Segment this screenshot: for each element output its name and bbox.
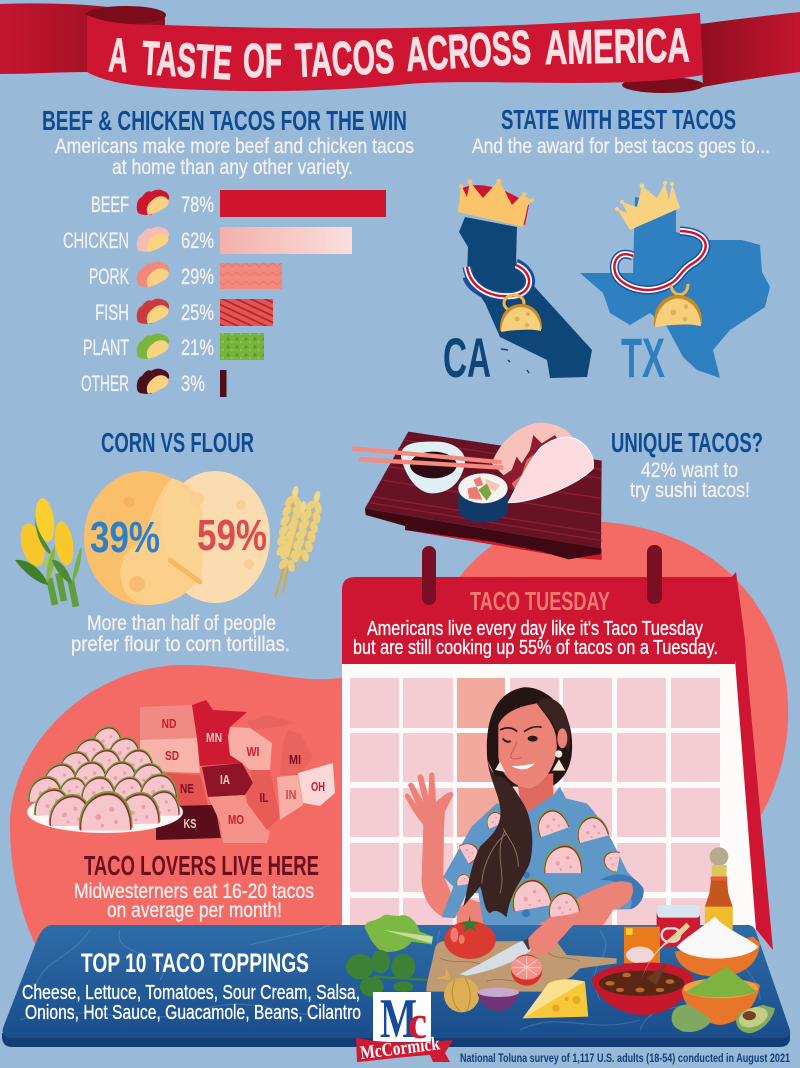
state: OH: [298, 763, 335, 806]
calendar fold: [729, 572, 773, 950]
state: SD: [140, 738, 200, 773]
green guacamole bowl: [682, 967, 760, 1025]
coral blobs: [10, 521, 788, 950]
knife: [459, 933, 537, 976]
description: [71, 612, 290, 656]
calendar rings: [422, 545, 662, 605]
hand and forearm: [528, 897, 620, 956]
flour bowl: [675, 917, 760, 977]
calendar header: [342, 577, 735, 664]
lettuce: [365, 915, 433, 952]
logo wordmark: McCormick: [359, 1033, 441, 1064]
illustration: sushi taco on tray: [352, 423, 602, 560]
icon: corn: [15, 497, 82, 607]
TX label: TX: [621, 326, 665, 389]
title words: [107, 19, 690, 90]
tray: [365, 432, 602, 560]
row: other: [81, 369, 226, 397]
panel: state with best tacos: [443, 104, 770, 389]
row: plant: PLANT: [83, 335, 129, 360]
taco: [492, 423, 594, 503]
state: NE: NE: [180, 781, 194, 796]
description: at home than any other variety.: [112, 156, 353, 179]
soy sauce dish: [401, 442, 465, 493]
cutting board: [426, 941, 617, 992]
row: plant: 21%: [181, 335, 214, 360]
state: IA: [202, 763, 253, 797]
logo mark: c: [408, 996, 427, 1049]
title banner: [0, 3, 800, 93]
neck: [517, 773, 553, 813]
state: MO: MO: [228, 812, 244, 827]
state: ND: [140, 705, 197, 740]
row: chicken: [63, 227, 352, 254]
eyes and brows: [500, 727, 542, 742]
state: WI: WI: [246, 744, 260, 759]
state: IL: IL: [260, 790, 269, 805]
panel: corn vs flour: [15, 427, 329, 656]
cilantro: [346, 950, 430, 997]
title words: OF: [243, 35, 282, 88]
state: NE: [157, 773, 208, 805]
description: on average per month!: [107, 899, 282, 922]
panel: beef and chicken tacos: [42, 105, 414, 397]
heading: TOP 10 TACO TOPPINGS: [81, 948, 309, 978]
title words: TACOS: [294, 31, 395, 88]
row: fish: FISH: [95, 300, 129, 325]
cut tomato: [511, 954, 542, 986]
icon: wheat: [272, 484, 329, 597]
ear: [557, 728, 567, 748]
description: Americans make more beef and chicken tacos: [55, 135, 414, 158]
state: IN: IN: [286, 787, 296, 802]
earrings: [495, 750, 565, 772]
title words: AMERICA: [544, 19, 690, 75]
Texas map with crown and medal: [580, 181, 770, 378]
cheese: [523, 979, 588, 1018]
California map with crown and medal: [458, 178, 592, 378]
row: other: 3%: [181, 371, 205, 396]
state: IN: [277, 775, 303, 820]
midwest map: [140, 700, 335, 843]
logo mark: M: [380, 988, 417, 1050]
row: chicken: 62%: [181, 228, 214, 253]
toppings list: [22, 981, 361, 1024]
venn tortillas: [84, 471, 270, 605]
row: beef: 78%: [181, 192, 214, 217]
state: MN: [192, 700, 247, 766]
shirt buttons: [522, 872, 530, 917]
illustration: ingredients right: [592, 847, 775, 1033]
illustration: woman chef: [405, 687, 644, 930]
description: Americans live every day like it's Taco Tuesday: [367, 617, 704, 640]
lower hand: [457, 899, 487, 925]
heading: BEEF & CHICKEN TACOS FOR THE WIN: [42, 105, 407, 136]
red onion: [477, 988, 519, 1011]
sushi roll: [458, 473, 508, 522]
ribbon fold shapes: [86, 6, 166, 24]
state: IL: [247, 770, 280, 830]
state: MI: [247, 715, 313, 775]
calendar grid: [350, 678, 720, 928]
raised arm and hand: [405, 772, 458, 917]
panel: counter with top 10 taco toppings: [2, 925, 790, 1047]
title words: TASTE: [140, 32, 233, 90]
toppings list: Cheese, Lettuce, Tomatoes, Sour Cream, Salsa,: [22, 981, 360, 1004]
row: beef: BEEF: [91, 192, 129, 217]
CA label: CA: [443, 326, 491, 389]
description: Midwesterners eat 16-20 tacos: [74, 880, 314, 903]
description: [630, 459, 750, 502]
red bowl of beans: [592, 963, 693, 1015]
jar: [657, 905, 700, 947]
shirt: [442, 787, 644, 925]
heading: TACO LOVERS LIVE HERE: [84, 850, 319, 881]
state: KS: [156, 805, 221, 840]
row: pork: [89, 262, 282, 289]
state: WI: [228, 727, 272, 770]
state: OH: OH: [311, 779, 325, 794]
title words: A: [107, 29, 129, 83]
description: [55, 135, 414, 179]
seasoning packet: [624, 927, 660, 963]
corn value: 39%: [90, 513, 160, 562]
row: pork: PORK: [89, 264, 129, 289]
state: KS: KS: [184, 816, 197, 831]
right arm: [530, 881, 633, 930]
onion: [437, 967, 479, 1012]
shirt taco pattern: [455, 805, 620, 917]
panel: unique tacos: [611, 427, 763, 502]
calendar page: [342, 660, 756, 930]
description: More than half of people: [87, 612, 276, 635]
smile: [512, 763, 535, 769]
left ribbon tail: [0, 3, 165, 74]
plate of tacos: [27, 726, 183, 833]
description: [353, 617, 718, 659]
panel: taco tuesday calendar: [342, 545, 773, 950]
hot sauce bottle: [705, 847, 733, 930]
description: try sushi tacos!: [630, 479, 750, 502]
row: other: OTHER: [81, 371, 129, 396]
counter: [2, 1033, 790, 1047]
description: 42% want to: [641, 459, 738, 482]
toppings list: Onions, Hot Sauce, Guacamole, Beans, Cilantro: [25, 1001, 361, 1024]
wooden scoop: [641, 923, 690, 985]
heading: CORN VS FLOUR: [101, 427, 254, 458]
row: fish: 25%: [181, 300, 214, 325]
illustration: ingredients left: [346, 897, 620, 1018]
state: ND: ND: [162, 716, 176, 731]
row: pork: 29%: [181, 264, 214, 289]
avocados: [672, 1003, 775, 1033]
state: SD: SD: [165, 748, 179, 763]
logo ribbon: [356, 1037, 453, 1062]
nose: [511, 742, 522, 759]
state: MO: [208, 795, 270, 843]
title words: ACROSS: [404, 21, 532, 82]
ribbon main: [87, 13, 703, 91]
description: prefer flour to corn tortillas.: [71, 633, 290, 656]
panel: taco lovers live here: [27, 700, 335, 922]
McCormick logo: [356, 988, 453, 1064]
chopsticks: [352, 448, 503, 468]
description: [74, 880, 314, 922]
right ribbon tail: [700, 12, 800, 87]
tomato: [444, 915, 496, 959]
state: MI: MI: [289, 752, 301, 767]
long hair tress: [463, 760, 532, 917]
state: MN: MN: [206, 730, 222, 745]
row: fish: [95, 299, 273, 326]
state: IA: IA: [220, 772, 230, 787]
row: plant: [83, 333, 264, 360]
flour value: 59%: [197, 511, 267, 560]
face: [498, 703, 557, 788]
heading: TACO TUESDAY: [470, 586, 610, 616]
row: beef: [91, 190, 386, 217]
hair back: [487, 687, 572, 787]
row: chicken: CHICKEN: [63, 228, 129, 253]
right cuff: [600, 874, 644, 909]
